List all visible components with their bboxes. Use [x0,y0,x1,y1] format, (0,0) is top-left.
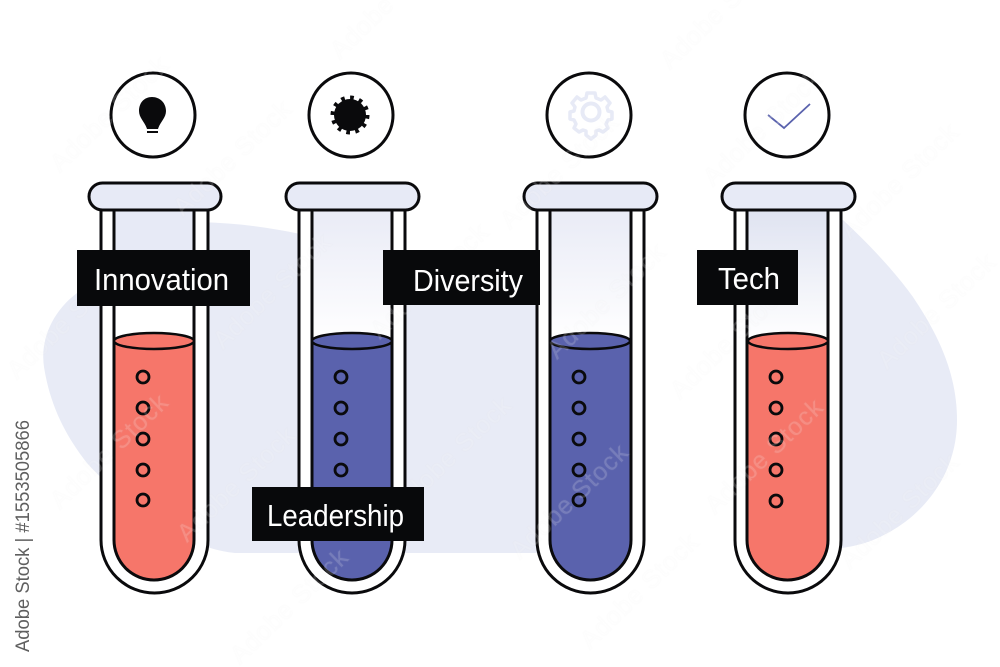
label: Leadership [252,487,424,541]
watermark overlay: Adobe Stock [665,278,794,404]
watermark overlay: Adobe Stock [168,95,297,221]
watermark overlay: Adobe Stock [208,228,337,354]
watermark overlay: Adobe Stock [495,108,624,234]
watermark overlay: Adobe Stock [872,248,1000,374]
tube: Diversity [524,183,657,593]
label: Innovation [77,250,250,306]
tube: Leadership [286,183,419,593]
watermark overlay: Adobe Stock [835,448,964,574]
watermark overlay: Adobe Stock [45,388,174,514]
watermark overlay: Adobe Stock [700,393,829,519]
watermark overlay: Adobe Stock [698,65,827,191]
label: Innovation: Innovation [94,262,229,297]
icon: check mark [745,73,829,157]
watermark overlay: Adobe Stock [172,421,301,547]
stock id vertical text: Adobe Stock | #1553505866 [13,420,34,652]
watermark overlay: Adobe Stock [542,238,671,364]
watermark overlay: Adobe Stock [2,258,131,384]
watermark overlay: Adobe Stock [835,118,964,244]
watermark overlay: Adobe Stock [225,543,354,667]
label: Tech [697,250,798,305]
tube: Innovation [89,183,221,593]
label: Leadership: Leadership [267,498,404,533]
background blob: left section [43,222,537,553]
icon: light bulb [111,73,195,157]
icon: gear [547,73,631,157]
background blob: right section [800,215,957,552]
watermark overlay: Adobe Stock [505,438,634,564]
tube: Tech [722,183,855,593]
watermark overlay: Adobe Stock [575,528,704,654]
watermark overlay: Adobe Stock [45,51,174,177]
label: Tech: Tech [718,261,780,296]
label: Diversity: Diversity [413,263,523,298]
label: Diversity [383,250,540,305]
icon: badge [309,73,393,157]
watermark overlay: Adobe Stock [365,218,494,344]
watermark overlay: Adobe Stock [388,391,517,517]
